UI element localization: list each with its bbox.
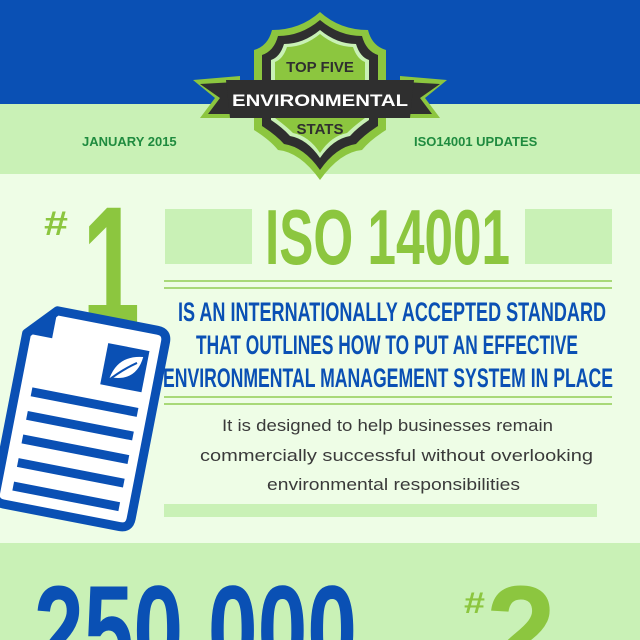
badge: top five environmental stats: [193, 12, 447, 180]
badge: top five environmental stats: ENVIRONMENTAL: [232, 91, 408, 110]
ribbon band: [226, 80, 414, 118]
body text: It is designed to help businesses remain: [222, 416, 553, 435]
badge text: TOP FIVE: [286, 59, 354, 76]
#1 number: [44, 195, 140, 330]
header green band: [0, 104, 640, 174]
body text: commercially successful without overlooking: [200, 446, 593, 465]
divider lines: [164, 280, 612, 282]
section 2 band: [0, 543, 640, 640]
body text: [200, 416, 593, 494]
body text: environmental responsibilities: [267, 475, 520, 494]
#2 number: #: [464, 587, 485, 620]
topic label: ISO14001 UPDATES: [414, 134, 537, 149]
header blue band: [0, 0, 640, 104]
#1 number: #: [44, 205, 68, 243]
date label: JANUARY 2015: [82, 134, 177, 149]
icon: document with leaf: [0, 306, 170, 532]
description heading: [163, 297, 613, 392]
bottom bar: [164, 504, 597, 517]
ribbon tails: [193, 76, 447, 118]
shield: [254, 12, 386, 180]
badge: top five environmental stats: STATS: [297, 121, 343, 138]
